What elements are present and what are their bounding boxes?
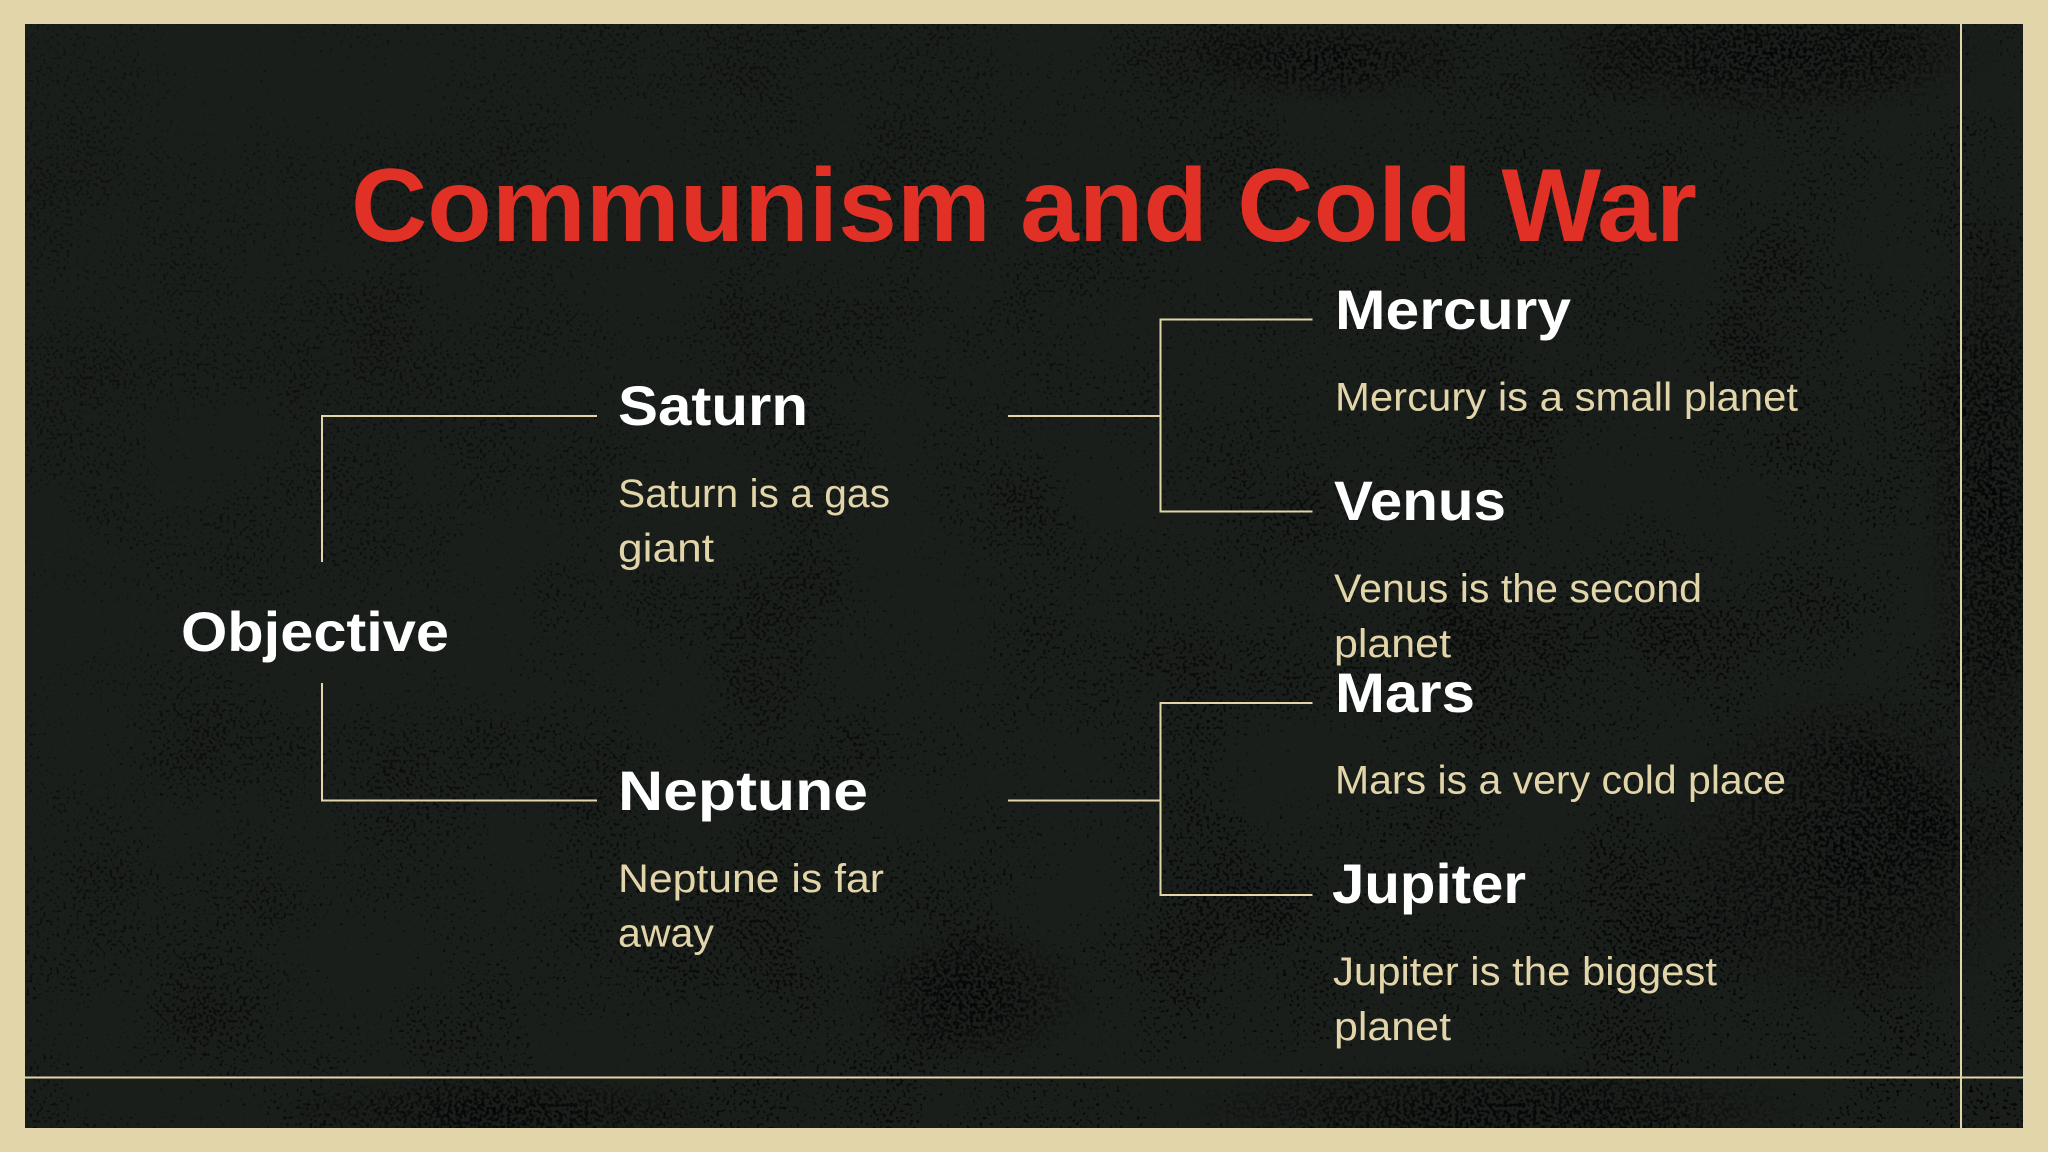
- text: Mars description: Mars is a very cold place: [1335, 758, 1786, 802]
- heading: Neptune: Neptune: [618, 759, 868, 822]
- decorative frame line: vertical: [1960, 24, 1962, 1128]
- item: Saturn: [618, 374, 890, 570]
- text: Saturn description: Saturn is a gas: [618, 472, 890, 516]
- text: Neptune description: Neptune is far: [618, 857, 884, 901]
- item: Mercury: [1335, 278, 1798, 420]
- label: Objective: Objective: [181, 600, 449, 663]
- heading: Saturn: Saturn: [618, 374, 808, 437]
- text: Saturn description: giant: [618, 526, 714, 570]
- item: Neptune: [618, 759, 884, 956]
- heading: Jupiter: Jupiter: [1332, 852, 1526, 915]
- item: Venus: [1334, 469, 1702, 666]
- title: Communism and Cold War: [351, 148, 1697, 264]
- text: Mercury description: Mercury is a small planet: [1335, 376, 1798, 420]
- connector: Objective to Saturn: [322, 416, 597, 562]
- connector: Objective to Neptune: [322, 683, 597, 800]
- heading: Venus: Venus: [1334, 469, 1506, 532]
- heading: Mercury: Mercury: [1335, 278, 1571, 341]
- text: Venus description: Venus is the second: [1334, 567, 1702, 611]
- decorative frame line: horizontal: [25, 1076, 2023, 1078]
- connector: Neptune to Mars and Jupiter: [1008, 703, 1312, 895]
- text: Venus description: planet: [1334, 622, 1451, 666]
- text: Jupiter description: planet: [1334, 1005, 1451, 1049]
- connector: Saturn to Mercury and Venus: [1008, 320, 1312, 512]
- item: Mars: [1335, 661, 1786, 802]
- text: Jupiter description: Jupiter is the biggest: [1333, 950, 1717, 994]
- text: Neptune description: away: [618, 912, 714, 956]
- item: Jupiter: [1332, 852, 1717, 1049]
- heading: Mars: Mars: [1335, 661, 1475, 724]
